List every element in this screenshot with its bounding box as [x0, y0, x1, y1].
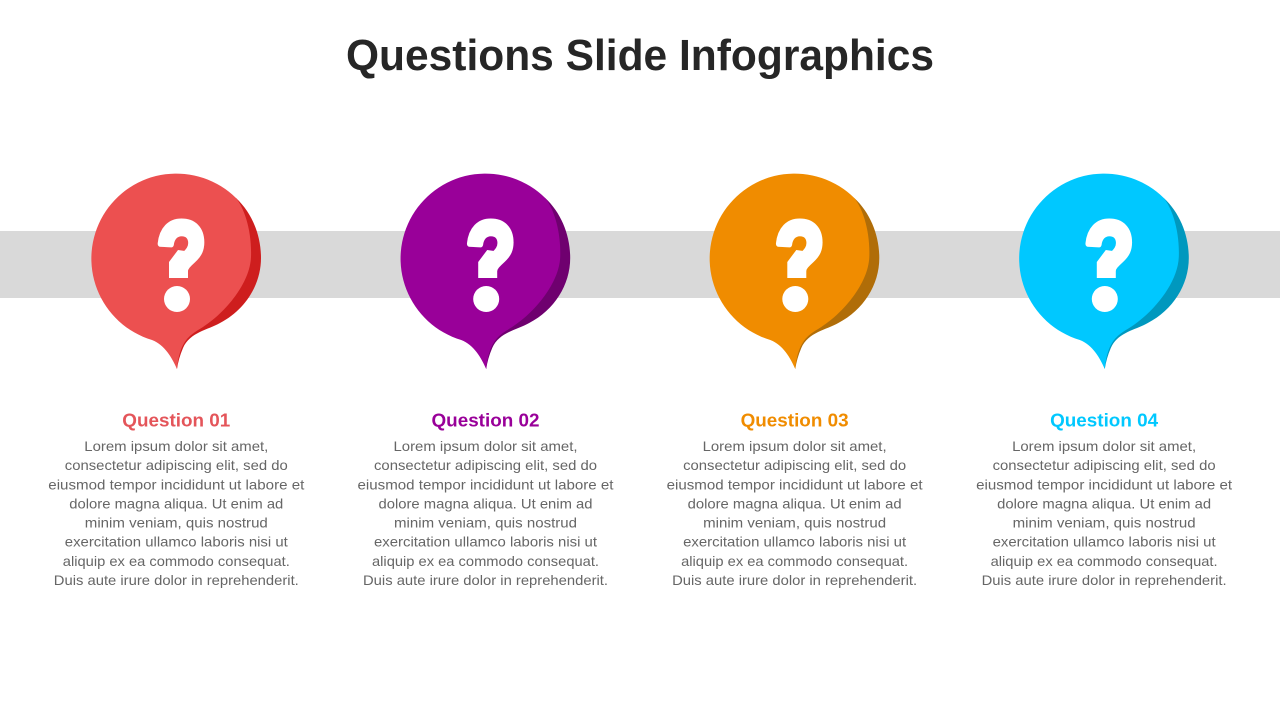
text block: question 02 description: aliquip ex ea commodo consequat.	[372, 553, 599, 569]
text block: question 03 description: consectetur adipiscing elit, sed do	[683, 457, 906, 473]
heading: question 02: Question 02	[432, 410, 540, 430]
panel: question 03	[667, 174, 923, 588]
text block: question 01 description: dolore magna aliqua. Ut enim ad	[69, 495, 283, 511]
text block: question 02 description: minim veniam, quis nostrud	[394, 515, 577, 531]
text block: question 03 description: aliquip ex ea commodo consequat.	[681, 553, 908, 569]
panel: question 01	[48, 174, 304, 588]
text block: question 03 description: exercitation ullamco laboris nisi ut	[683, 534, 906, 550]
infographic canvas	[0, 38, 1280, 588]
text block: question 03 description: dolore magna aliqua. Ut enim ad	[688, 495, 902, 511]
text block: question 04 description: dolore magna aliqua. Ut enim ad	[997, 495, 1211, 511]
text block: question 04 description: Lorem ipsum dolor sit amet,	[1012, 438, 1196, 454]
text block: question 03 description: Duis aute irure dolor in reprehenderit.	[672, 572, 917, 588]
text block: question 01 description: consectetur adipiscing elit, sed do	[65, 457, 288, 473]
text block: question 04 description	[976, 438, 1232, 588]
text block: question 02 description: exercitation ullamco laboris nisi ut	[374, 534, 597, 550]
text block: question 02 description: consectetur adipiscing elit, sed do	[374, 457, 597, 473]
text block: question 04 description: consectetur adipiscing elit, sed do	[993, 457, 1216, 473]
icon: blue question pin: ?	[1084, 201, 1135, 319]
text block: question 03 description: eiusmod tempor incididunt ut labore et	[667, 476, 923, 492]
icon: purple question pin: ?	[465, 201, 516, 319]
text block: question 02 description: dolore magna aliqua. Ut enim ad	[378, 495, 592, 511]
text block: question 03 description: Lorem ipsum dolor sit amet,	[703, 438, 887, 454]
text block: question 02 description: Duis aute irure dolor in reprehenderit.	[363, 572, 608, 588]
text block: question 02 description: Lorem ipsum dolor sit amet,	[394, 438, 578, 454]
text block: question 04 description: Duis aute irure dolor in reprehenderit.	[982, 572, 1227, 588]
text block: question 01 description: eiusmod tempor incididunt ut labore et	[48, 476, 304, 492]
heading: question 01: Question 01	[122, 410, 230, 430]
icon: purple question pin	[401, 174, 570, 369]
text block: question 03 description: minim veniam, quis nostrud	[703, 515, 886, 531]
text block: question 02 description	[358, 438, 614, 588]
text block: question 01 description: aliquip ex ea commodo consequat.	[63, 553, 290, 569]
text block: question 02 description: eiusmod tempor incididunt ut labore et	[358, 476, 614, 492]
text block: question 04 description: eiusmod tempor incididunt ut labore et	[976, 476, 1232, 492]
icon: red question pin	[91, 174, 261, 369]
title: Questions Slide Infographics	[346, 31, 934, 80]
text block: question 01 description: Duis aute irure dolor in reprehenderit.	[54, 572, 299, 588]
icon: red question pin: ?	[156, 201, 207, 319]
icon: orange question pin	[710, 174, 879, 369]
text block: question 01 description: exercitation ullamco laboris nisi ut	[65, 534, 288, 550]
text block: question 04 description: exercitation ullamco laboris nisi ut	[993, 534, 1216, 550]
text block: question 01 description	[48, 438, 304, 588]
horizontal grey band	[0, 231, 1280, 298]
panel: question 04	[976, 174, 1232, 588]
text block: question 03 description	[667, 438, 923, 588]
text block: question 01 description: Lorem ipsum dolor sit amet,	[84, 438, 268, 454]
text block: question 04 description: aliquip ex ea commodo consequat.	[991, 553, 1218, 569]
text block: question 01 description: minim veniam, quis nostrud	[85, 515, 268, 531]
heading: question 04: Question 04	[1050, 410, 1159, 430]
icon: blue question pin	[1019, 174, 1189, 369]
panel: question 02	[358, 174, 614, 588]
text block: question 04 description: minim veniam, quis nostrud	[1013, 515, 1196, 531]
icon: orange question pin: ?	[775, 201, 825, 319]
heading: question 03: Question 03	[741, 410, 849, 430]
